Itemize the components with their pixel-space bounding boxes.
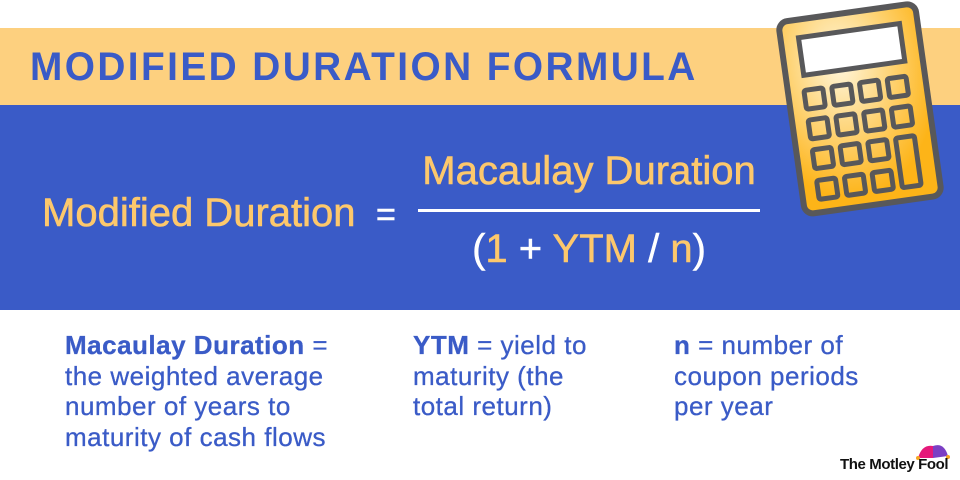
definition: Macaulay Duration: maturity of cash flows [65,422,326,452]
definition: YTM [413,330,587,421]
definition: n: coupon periods [674,360,859,390]
definition: n [674,330,859,421]
denominator: (1 + YTM / n) [472,227,706,271]
formula panel [0,105,960,310]
definition: Macaulay Duration: number of years to [65,391,291,421]
definition: YTM: YTM = yield to [413,330,587,360]
definition: Macaulay Duration: the weighted average [65,360,324,390]
definition: YTM: maturity (the [413,360,564,390]
formula left side: Modified Duration = [42,191,396,235]
logo: The Motley Fool [840,445,950,473]
definition: n: per year [674,391,773,421]
numerator: Macaulay Duration [422,149,756,193]
title: MODIFIED DURATION FORMULA [30,45,698,89]
definition: Macaulay Duration [65,330,328,452]
title band [0,28,960,105]
definition: n: n = number of [674,330,843,360]
definition: YTM: total return) [413,391,552,421]
definition: Macaulay Duration: Macaulay Duration = [65,330,328,360]
fraction line [418,209,760,212]
icon: calculator [776,1,944,216]
logo: The Motley Fool: The Motley Fool [840,456,948,473]
icon: jester hat [916,445,950,460]
